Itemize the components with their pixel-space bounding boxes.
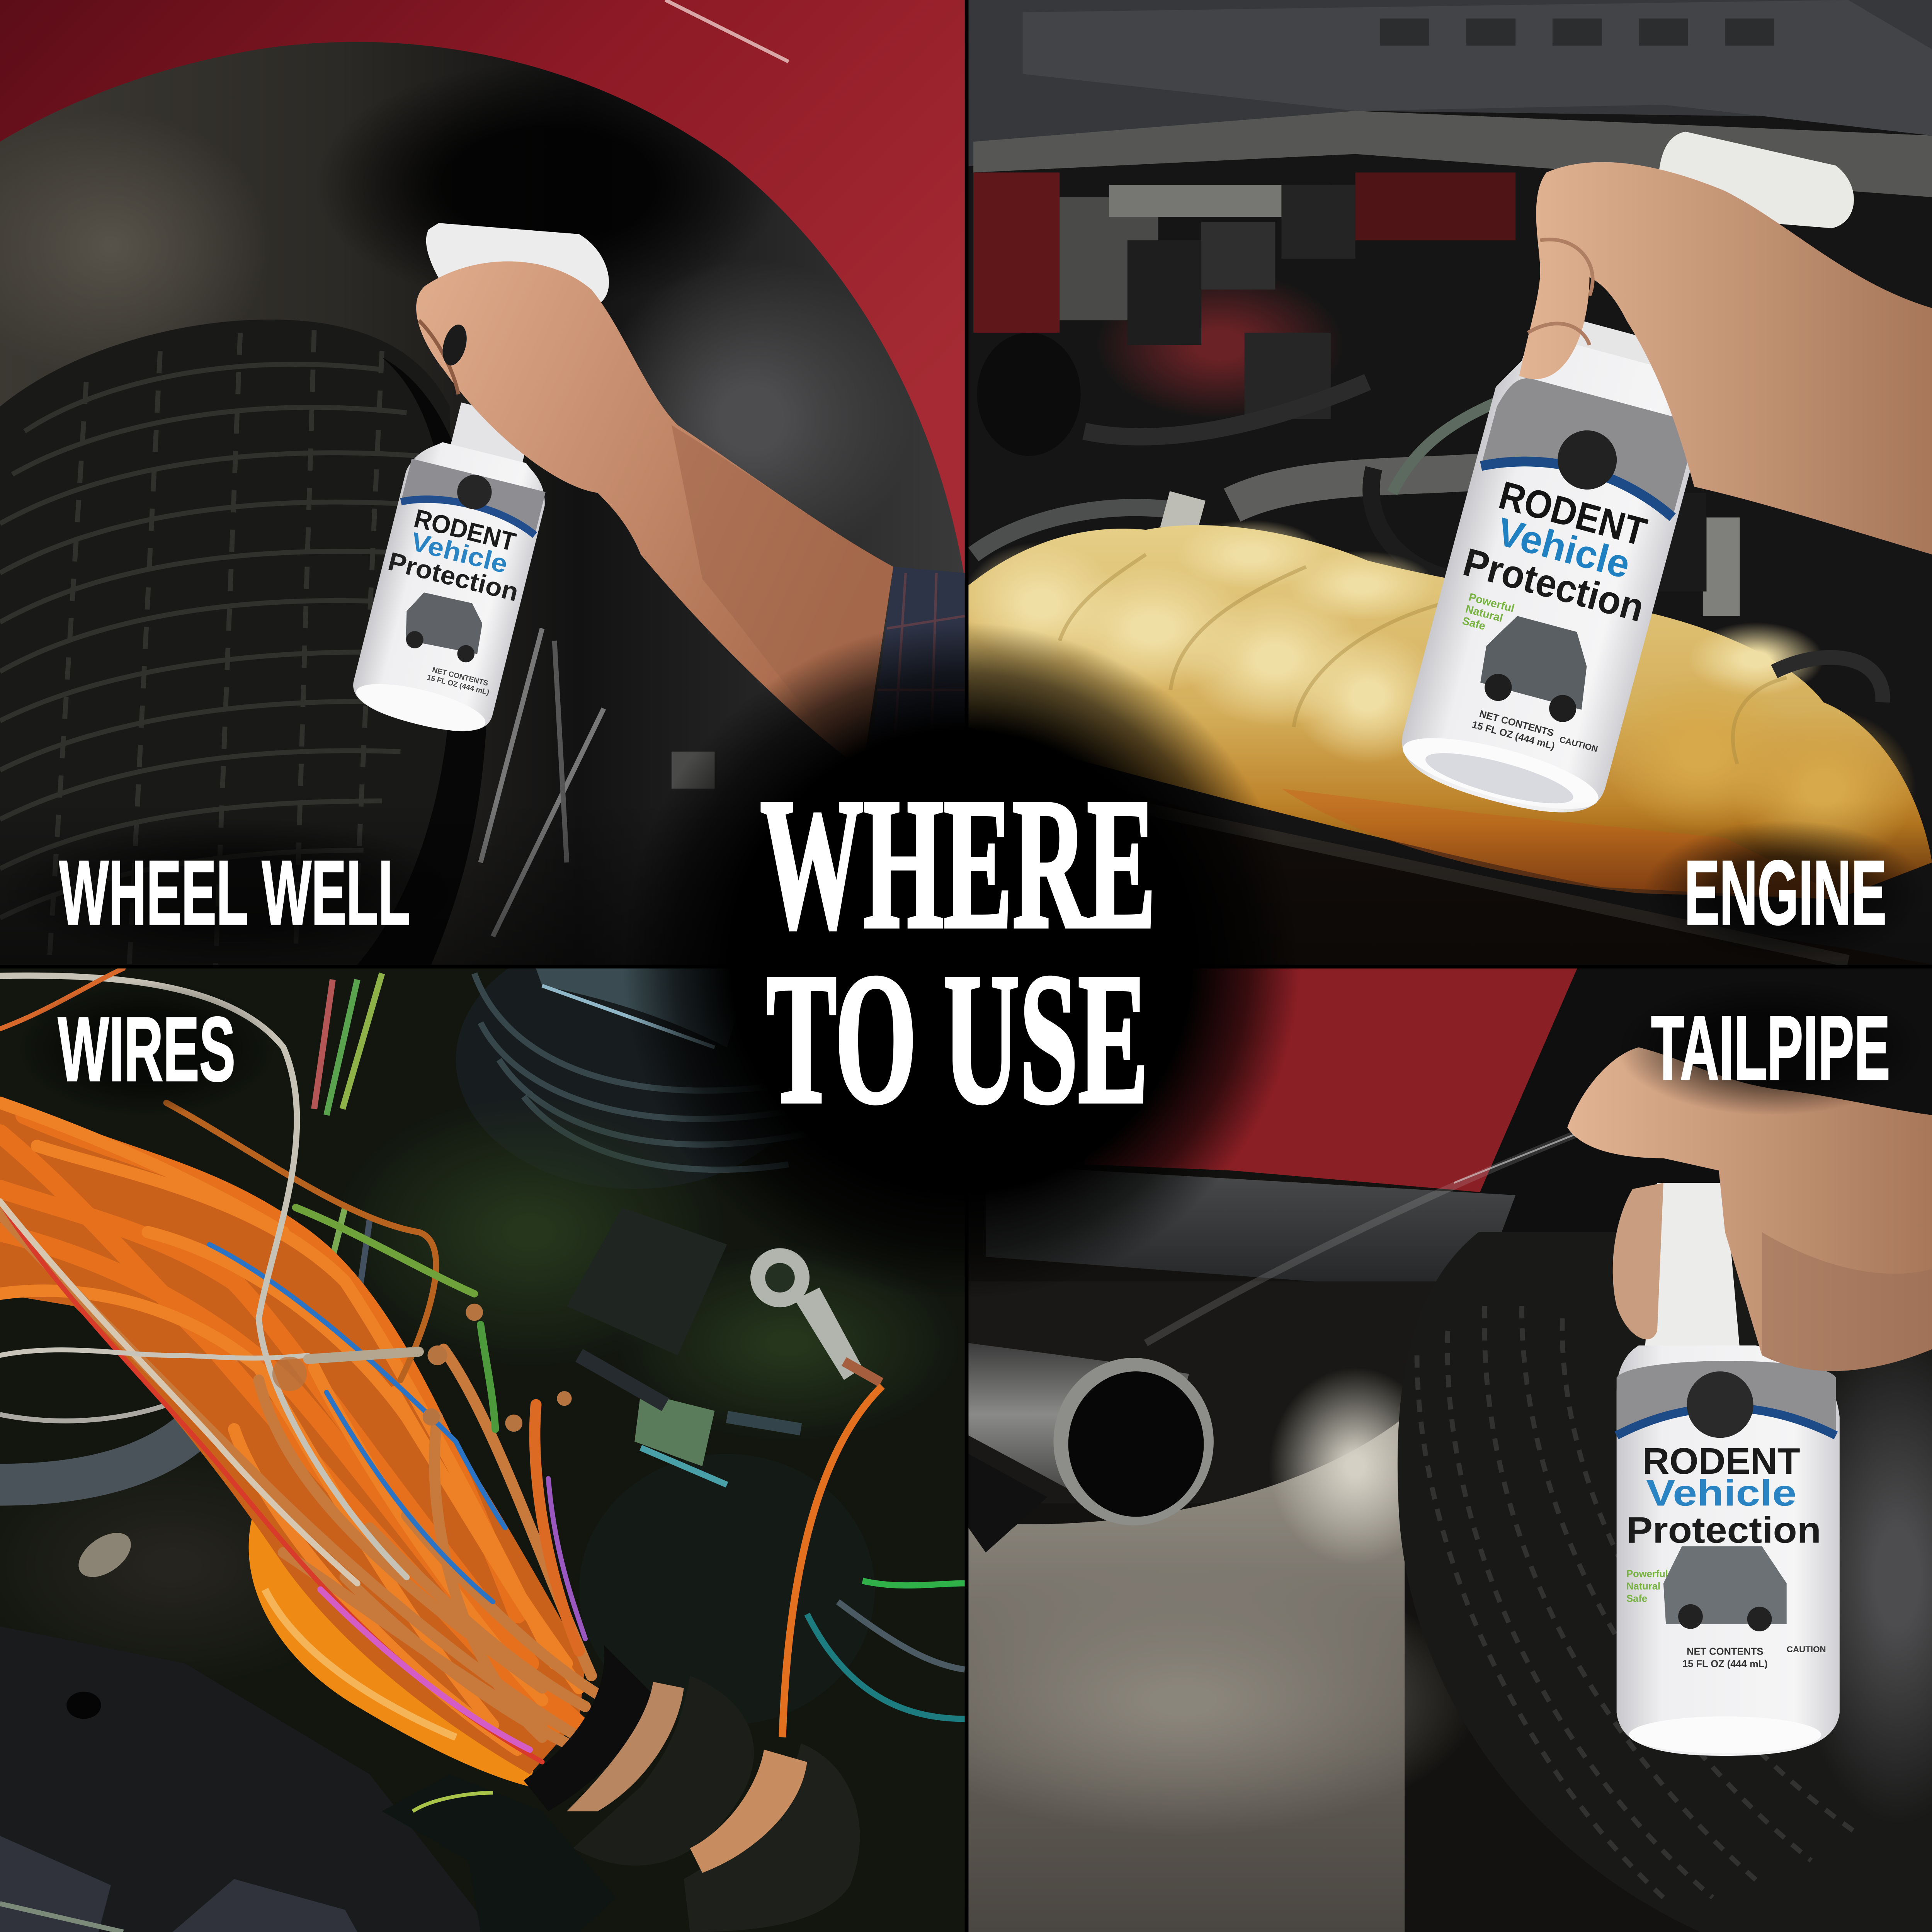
title: [760, 760, 1156, 1142]
bottle: tailpipe: NET CONTENTS: [1687, 1646, 1763, 1657]
red engine bay: [973, 172, 1060, 333]
bottle: tailpipe: Vehicle: [1646, 1473, 1796, 1514]
panel: wheel well photo: [0, 0, 965, 965]
zip clamp and copper ends: [524, 1645, 684, 1811]
wire bundle base mass: [0, 1103, 585, 1774]
bottle: engine: [1392, 95, 1862, 851]
bottle: tailpipe: RODENT: [1643, 1440, 1800, 1482]
label: wheel well: WHEEL WELL: [59, 842, 410, 944]
black connector pad: [567, 1208, 727, 1355]
label: wires: WIRES: [58, 998, 235, 1100]
red bumper panel: [1084, 968, 1577, 1195]
black plastic tray: [0, 1626, 493, 1932]
cowl panel: [968, 0, 1932, 166]
bellows hose: [456, 930, 813, 1189]
wire bundle: [0, 968, 598, 1762]
wheel-side grey hose: [0, 1405, 216, 1485]
tire: [0, 320, 488, 965]
tailpipe: [968, 1343, 1214, 1553]
bottle: wheel well: NET CONTENTS: [431, 666, 489, 688]
debris and mossy floor: [333, 1097, 727, 1368]
sleeve: [869, 567, 965, 789]
ring terminal: [750, 1248, 881, 1383]
spray mist: [1146, 1134, 1577, 1343]
bottle: wheel well: RODENT: [411, 504, 519, 557]
spray trigger: [426, 223, 609, 320]
panel: chewed wires photo: [0, 930, 965, 1932]
plastic clip: [382, 1774, 616, 1932]
rear tire: [1398, 1232, 1932, 1932]
connectors: [579, 1355, 801, 1485]
title: TO USE: [766, 935, 1148, 1142]
coolant reservoir: [961, 520, 1932, 900]
bottle: wheel well: 15 FL OZ (444 mL): [426, 673, 490, 697]
bottle: tailpipe: 15 FL OZ (444 mL): [1682, 1658, 1768, 1669]
bottle: tailpipe: [1617, 1183, 1840, 1756]
green wires top: [314, 973, 965, 1719]
ground: [968, 1417, 1405, 1932]
fabric tape wraps: [573, 1676, 860, 1932]
orange hanging wire: [782, 1386, 882, 1737]
bottle: tailpipe: Safe: [1626, 1593, 1647, 1604]
arm and hand: [416, 261, 893, 770]
dark vehicle side: [1479, 968, 1932, 1355]
bottle: wheel well: [347, 393, 564, 741]
title: WHERE: [760, 760, 1156, 967]
red fender: [0, 0, 965, 579]
bottle: tailpipe: CAUTION: [1787, 1645, 1826, 1654]
engine components: [973, 185, 1515, 579]
panel: engine bay photo: [961, 0, 1932, 965]
bottle: engine: Natural: [1464, 603, 1504, 624]
bottle: engine: CAUTION: [1558, 735, 1599, 754]
bottle: engine: RODENT: [1495, 473, 1651, 554]
bumper: [986, 1164, 1515, 1294]
center black vignette: [616, 616, 1306, 1306]
bottle: wheel well: Vehicle: [408, 527, 510, 579]
bottle: tailpipe: Natural: [1626, 1581, 1660, 1592]
bottle: engine: Protection: [1459, 540, 1649, 630]
chewed wire tips: [272, 1304, 572, 1432]
bottle: tailpipe: Protection: [1626, 1509, 1821, 1551]
label shadows: [0, 818, 1927, 1116]
bottle: engine: Powerful: [1467, 591, 1516, 615]
hand and arm: [1519, 162, 1932, 554]
bottle: engine: Vehicle: [1492, 509, 1635, 587]
hand and arm: [1567, 1047, 1932, 1371]
bottle: tailpipe: Powerful: [1626, 1569, 1668, 1580]
panel: tailpipe photo: [887, 968, 1932, 1932]
label background shade: [0, 801, 965, 965]
bottle: engine: 15 FL OZ (444 mL): [1471, 719, 1556, 752]
bottle: wheel well: Protection: [385, 547, 521, 607]
bottle: engine: Safe: [1461, 615, 1487, 633]
bottle: engine: NET CONTENTS: [1478, 708, 1555, 739]
engine bracket reflections: [481, 628, 604, 936]
orange loom: [249, 1515, 542, 1787]
